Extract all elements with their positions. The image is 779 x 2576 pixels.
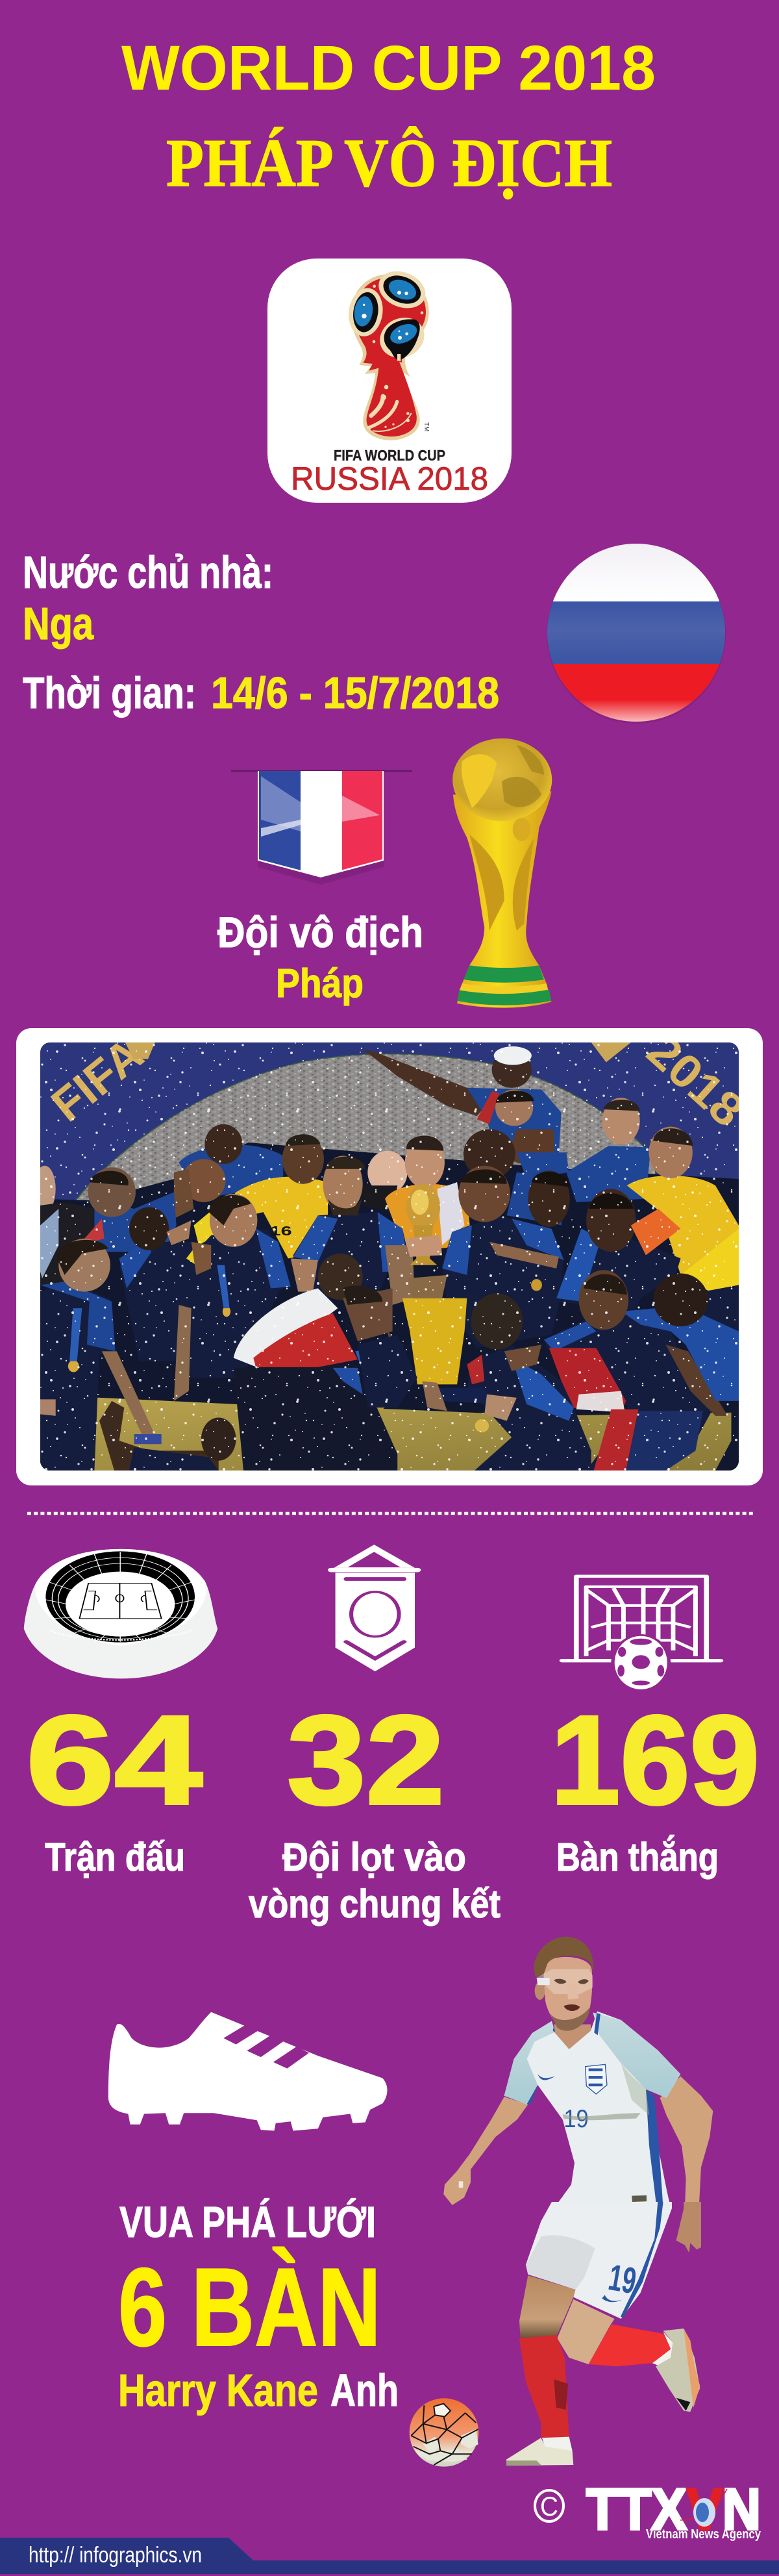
front left <box>40 1282 116 1471</box>
text block: tournament dates <box>23 668 499 718</box>
text: website url: http:// infographics.vn <box>29 2543 202 2568</box>
label: Vua phá lưới: VUA PHÁ LƯỚI <box>119 2198 376 2247</box>
football <box>410 2398 478 2467</box>
logo: TTXVN <box>586 2477 761 2542</box>
text: Russia 2018: RUSSIA 2018 <box>291 461 488 497</box>
photo effect: falling rain <box>27 1037 754 1479</box>
heading: Pháp vô địch: PHÁP VÔ ĐỊCH <box>166 125 612 201</box>
upper body <box>443 1937 713 2208</box>
text block: champion team <box>217 908 423 1006</box>
divider: dotted line <box>27 1512 755 1515</box>
footer band <box>0 2538 779 2574</box>
Trophy and goalkeeper <box>402 1298 467 1384</box>
value: dates: 14/6 - 15/7/2018 <box>211 668 499 718</box>
back row <box>362 1049 482 1116</box>
label: Bàn thắng: Bàn thắng <box>556 1835 719 1879</box>
label: Đội vô địch: Đội vô địch <box>217 908 423 956</box>
medals <box>223 1306 230 1317</box>
value: 6 bàn: 6 BÀN <box>118 2245 381 2369</box>
text: TM mark: TM <box>423 422 430 431</box>
icon: stadium <box>24 1549 217 1678</box>
text: C: C <box>540 2491 558 2521</box>
text: FIFA World Cup: FIFA WORLD CUP <box>334 447 445 464</box>
number: 169: 169 <box>550 1689 760 1831</box>
icon: pennant banner <box>328 1545 421 1671</box>
label: Thời gian: Thời gian: <box>23 668 196 718</box>
image: Harry Kane with ball <box>410 1937 713 2467</box>
name: Harry Kane: Harry Kane <box>118 2365 318 2416</box>
front right <box>544 1311 715 1471</box>
stat: 64 matches <box>26 1689 203 1879</box>
text block: host country <box>23 547 273 649</box>
icon: France flag pennant <box>231 771 412 885</box>
upper body: 19 <box>563 2104 589 2133</box>
dark mass of players <box>40 1143 739 1471</box>
icon: World Cup 2018 emblem <box>345 264 431 440</box>
jersey number 16: 16 <box>270 1223 292 1239</box>
icon: World Cup trophy <box>452 739 552 1007</box>
front centre: Griezmann <box>467 1345 591 1471</box>
stat: 32 teams <box>249 1689 501 1926</box>
label: Đội lọt vào vòng chung kết <box>249 1835 501 1926</box>
label: Trận đấu: Trận đấu <box>45 1835 185 1879</box>
wordmark: TTXVN: TTXVN <box>586 2477 761 2542</box>
stat: 169 goals <box>550 1689 760 1879</box>
value: Pháp: Pháp <box>276 961 364 1006</box>
text block: top scorer <box>118 2198 399 2416</box>
icon: goal with football <box>562 1576 721 1691</box>
icon: Russia flag ball <box>545 539 727 724</box>
label: Đội lọt vào vòng chung kết: vòng chung kết <box>249 1882 501 1926</box>
title: World Cup 2018: WORLD CUP 2018 <box>121 32 656 103</box>
middle row <box>40 1165 56 1206</box>
photo text: 2018 stadium board: 2018 <box>637 1024 754 1137</box>
golden podium board <box>64 1396 732 1471</box>
number: 32: 32 <box>287 1689 445 1831</box>
photo: France team celebrating with trophy <box>27 1024 754 1479</box>
panel: team photo card <box>16 1024 763 1485</box>
photo text: FIFA stadium board: FIFA <box>42 1028 153 1131</box>
icon: copyright symbol <box>535 2490 563 2521</box>
panel: FIFA World Cup logo card <box>267 259 512 503</box>
label: Đội lọt vào vòng chung kết: Đội lọt vào <box>282 1835 466 1879</box>
icon: globe <box>680 2489 727 2527</box>
lower body: 19 <box>606 2257 639 2302</box>
number: 64: 64 <box>26 1689 203 1831</box>
value: Nga: Nga <box>23 598 94 649</box>
lower body <box>410 2202 701 2467</box>
front centre man with flag <box>234 1365 397 1471</box>
icon: football boot <box>108 2012 388 2130</box>
country: Anh: Anh <box>330 2365 399 2416</box>
label: Nước chủ nhà: Nước chủ nhà: <box>23 547 273 598</box>
